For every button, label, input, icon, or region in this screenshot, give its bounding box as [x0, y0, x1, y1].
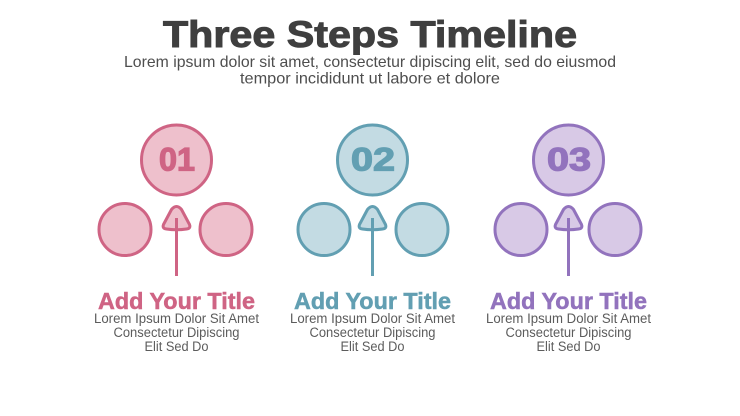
icon: number circle 01: [142, 125, 212, 195]
panel: step 3: [486, 125, 651, 354]
icon: right circle 3: [589, 204, 641, 256]
icon: number circle 01: 01: [159, 142, 195, 178]
icon: left circle 1: [99, 204, 151, 256]
subtitle: [124, 54, 616, 88]
icon: right circle 1: [200, 204, 252, 256]
subtitle: Lorem ipsum dolor sit amet, consectetur dipiscing elit, sed do eiusmod: [124, 54, 616, 71]
heading: step 2 title: Add Your Title: [294, 288, 451, 314]
text block: step 2 body: Lorem Ipsum Dolor Sit Amet: [290, 311, 455, 326]
text block: step 2 body: Consectetur Dipiscing: [310, 325, 436, 340]
subtitle: tempor incididunt ut labore et dolore: [240, 70, 500, 88]
text block: step 3 body: [486, 311, 651, 354]
text block: step 3 body: Consectetur Dipiscing: [506, 325, 632, 340]
text block: step 1 body: Elit Sed Do: [144, 339, 208, 354]
panel: step 2: [290, 125, 455, 354]
panel: step 1: [94, 125, 259, 354]
icon: left circle 2: [298, 204, 350, 256]
icon: number circle 02: [338, 125, 408, 195]
text block: step 2 body: [290, 311, 455, 354]
icon: right circle 2: [396, 204, 448, 256]
text block: step 3 body: Lorem Ipsum Dolor Sit Amet: [486, 311, 651, 326]
arrow 3: [555, 206, 582, 276]
title: Three Steps Timeline: [163, 14, 577, 55]
icon: number circle 02: 02: [351, 142, 395, 178]
heading: step 3 title: Add Your Title: [490, 288, 647, 314]
icon: left circle 3: [495, 204, 547, 256]
arrow 2: [359, 206, 386, 276]
icon: number circle 03: [534, 125, 604, 195]
text block: step 1 body: Lorem Ipsum Dolor Sit Amet: [94, 311, 259, 326]
text block: step 3 body: Elit Sed Do: [536, 339, 600, 354]
text block: step 2 body: Elit Sed Do: [340, 339, 404, 354]
arrow 1: [163, 206, 190, 276]
text block: step 1 body: Consectetur Dipiscing: [114, 325, 240, 340]
icon: number circle 03: 03: [547, 142, 591, 178]
text block: step 1 body: [94, 311, 259, 354]
heading: step 1 title: Add Your Title: [98, 288, 255, 314]
